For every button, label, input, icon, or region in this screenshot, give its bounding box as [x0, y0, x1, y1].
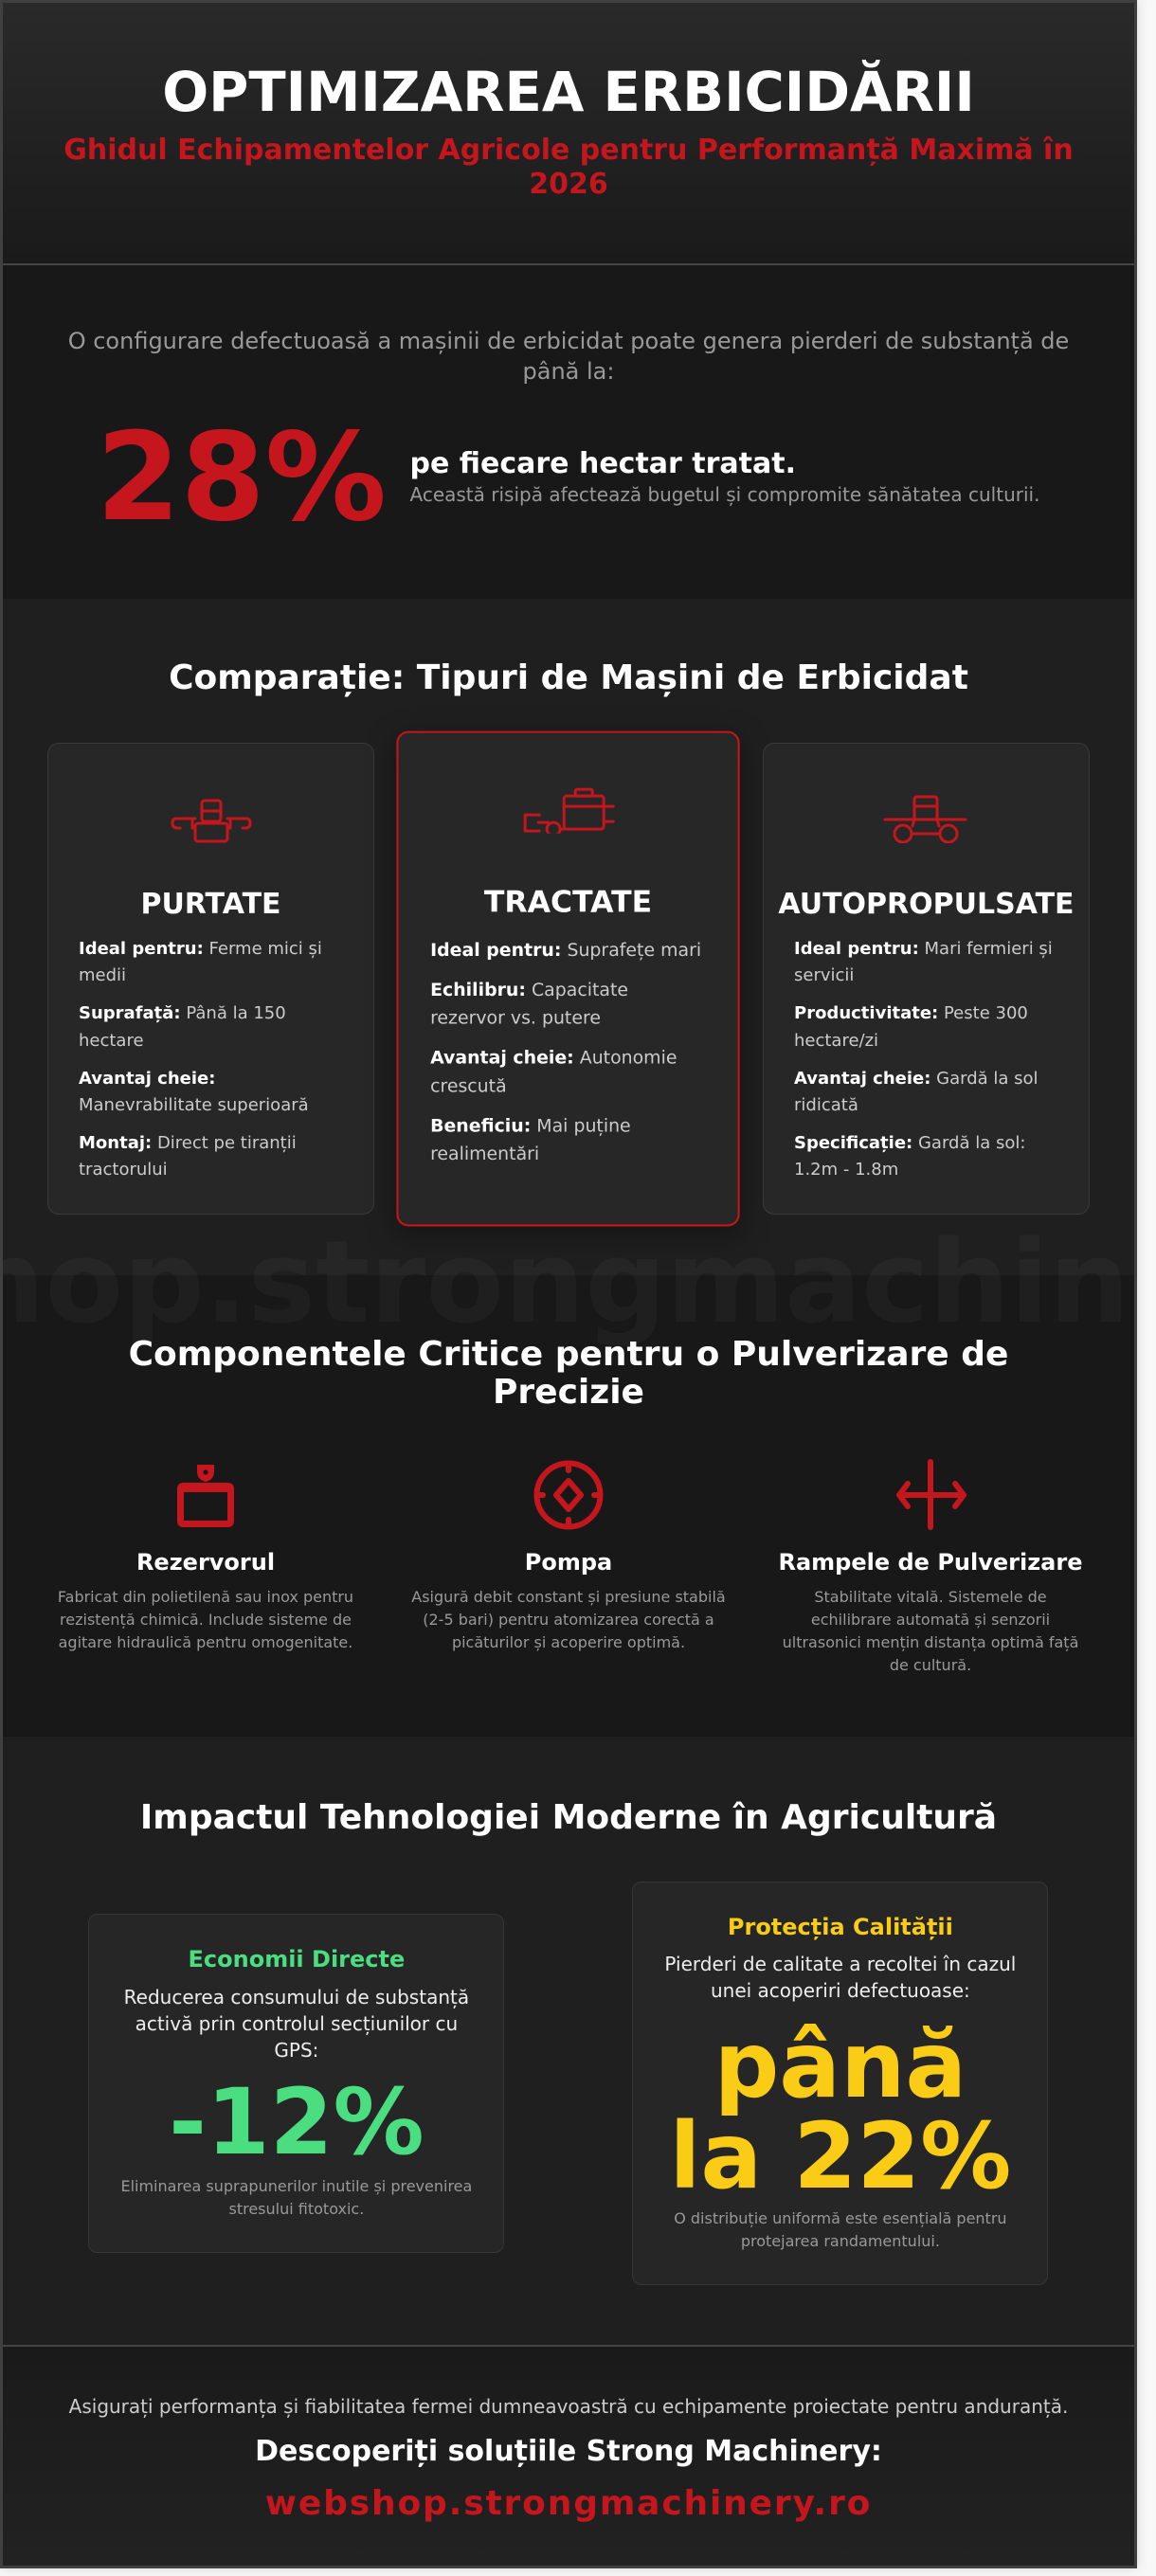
impact heading: Impactul Tehnologiei Moderne în Agricultură: [140, 1798, 997, 1837]
component description: echilibrare automată și senzorii: [811, 1611, 1050, 1629]
feature list: [79, 939, 322, 1180]
card: autopropulsate: [763, 743, 1090, 1215]
component description: rezistență chimică. Include sisteme de: [60, 1611, 352, 1629]
feature list: Specificație: Gardă la sol:: [794, 1133, 1025, 1153]
component: tank: [58, 1465, 353, 1651]
card: tractate: [396, 731, 739, 1226]
big number până la 22%: la 22%: [669, 2103, 1011, 2209]
feature list: medii: [79, 965, 126, 985]
big number -12%: -12%: [169, 2069, 424, 2175]
card text: GPS:: [274, 2039, 318, 2062]
component description: Fabricat din polietilenă sau inox pentru: [58, 1588, 353, 1606]
panel: footer: [0, 2345, 1137, 2568]
feature list: rezervor vs. putere: [430, 1008, 601, 1029]
card text: [124, 1986, 469, 2062]
feature list: Beneficiu: Mai puține: [430, 1116, 630, 1137]
lead text: O configurare defectuoasă a mașinii de erbicidat poate genera pierderi de substanță de: [68, 328, 1069, 354]
component description: Asigură debit constant și presiune stabilă: [411, 1588, 726, 1606]
card note: O distribuție uniformă este esențială pentru: [674, 2209, 1007, 2227]
feature list: realimentări: [430, 1144, 539, 1164]
icon: trailed sprayer: [523, 788, 615, 834]
feature list: ridicată: [794, 1095, 858, 1115]
card text: unei acoperiri defectuoase:: [711, 1979, 970, 2002]
feature list: Manevrabilitate superioară: [79, 1095, 309, 1115]
subtitle: 2026: [529, 168, 608, 201]
feature list: Ideal pentru: Ferme mici și: [79, 939, 322, 959]
component description: ultrasonici mențin distanța optimă față: [783, 1633, 1078, 1651]
feature list: Suprafață: Până la 150: [79, 1003, 286, 1023]
icon: self-propelled sprayer: [883, 796, 966, 843]
card note: stresului fitotoxic.: [229, 2200, 364, 2218]
card title: TRACTATE: [484, 885, 652, 920]
feature list: Echilibru: Capacitate: [430, 980, 628, 1000]
panel: components: [0, 1275, 1137, 1737]
stat description: Această risipă afectează bugetul și compromite sănătatea culturii.: [409, 483, 1039, 506]
feature list: Avantaj cheie: Autonomie: [430, 1048, 677, 1069]
big number până la 22%: [669, 2012, 1011, 2209]
icon: spray boom: [896, 1459, 966, 1530]
feature list: [430, 940, 701, 1164]
big number până la 22%: până: [714, 2012, 966, 2118]
component title: Rezervorul: [136, 1549, 275, 1576]
icon: pump: [534, 1461, 603, 1529]
lead text: până la:: [523, 358, 614, 385]
panel: comparison: [0, 599, 1137, 1275]
feature list: Productivitate: Peste 300: [794, 1003, 1028, 1023]
feature list: Ideal pentru: Mari fermieri și: [794, 939, 1053, 959]
feature list: hectare: [79, 1031, 144, 1051]
icon: mounted sprayer: [171, 800, 252, 843]
card note: [120, 2177, 472, 2218]
component description: (2-5 bari) pentru atomizarea corectă a: [423, 1611, 714, 1629]
component description: [783, 1588, 1078, 1674]
big number 28%: 28%: [97, 407, 387, 549]
feature list: Montaj: Direct pe tiranții: [79, 1133, 297, 1153]
component description: de cultură.: [890, 1656, 971, 1674]
icon: tank: [177, 1465, 234, 1527]
card text: Pierderi de calitate a recoltei în cazul: [664, 1953, 1016, 1975]
panel: hero statistic: [0, 265, 1137, 599]
card note: Eliminarea suprapunerilor inutile și prevenirea: [120, 2177, 472, 2195]
subtitle: [63, 134, 1074, 201]
components heading: Componentele Critice pentru o Pulverizare de: [129, 1335, 1008, 1374]
feature list: [794, 939, 1053, 1180]
component description: [58, 1588, 353, 1651]
feature list: Ideal pentru: Suprafețe mari: [430, 940, 701, 961]
component description: agitare hidraulică pentru omogenitate.: [59, 1633, 352, 1651]
components heading: [129, 1335, 1008, 1412]
feature list: servicii: [794, 965, 854, 985]
card note: [674, 2209, 1007, 2250]
title: OPTIMIZAREA ERBICIDĂRII: [162, 61, 975, 123]
component description: [411, 1588, 726, 1651]
stat heading: pe fiecare hectar tratat.: [409, 447, 796, 480]
lead text: [68, 328, 1069, 385]
card: quality protection: [632, 1882, 1048, 2285]
card title: Economii Directe: [189, 1946, 405, 1973]
component: pump: [411, 1461, 726, 1651]
card: direct savings: [88, 1914, 504, 2253]
feature list: Avantaj cheie: Gardă la sol: [794, 1069, 1039, 1089]
component description: Stabilitate vitală. Sistemele de: [814, 1588, 1047, 1606]
card title: PURTATE: [140, 888, 281, 921]
feature list: Avantaj cheie:: [79, 1069, 215, 1089]
subtitle: Ghidul Echipamentelor Agricole pentru Performanță Maximă în: [63, 134, 1074, 167]
component title: Rampele de Pulverizare: [779, 1549, 1082, 1576]
website link: webshop.strongmachinery.ro: [265, 2484, 872, 2523]
card text: activă prin controlul secțiunilor cu: [135, 2012, 458, 2035]
component: booms: [779, 1459, 1082, 1674]
comparison heading: Comparație: Tipuri de Mașini de Erbicidat: [169, 658, 968, 697]
card note: protejarea randamentului.: [741, 2232, 940, 2250]
card text: [664, 1953, 1016, 2002]
card: purtate: [47, 743, 374, 1215]
feature list: 1.2m - 1.8m: [794, 1160, 898, 1180]
components heading: Precizie: [493, 1373, 644, 1412]
footer text: Asigurați performanța și fiabilitatea fermei dumneavoastră cu echipamente proiectate pentru anduranță.: [69, 2395, 1068, 2418]
call to action: Descoperiți soluțiile Strong Machinery:: [255, 2435, 882, 2468]
feature list: crescută: [430, 1075, 506, 1096]
card title: AUTOPROPULSATE: [778, 888, 1075, 921]
component description: picăturilor și acoperire optimă.: [452, 1633, 685, 1651]
panel: header: [0, 0, 1137, 265]
component title: Pompa: [525, 1549, 612, 1576]
card text: Reducerea consumului de substanță: [124, 1986, 469, 2009]
card title: Protecția Calității: [728, 1914, 953, 1940]
panel: impact: [0, 1737, 1137, 2345]
feature list: tractorului: [79, 1160, 168, 1180]
feature list: hectare/zi: [794, 1031, 878, 1051]
